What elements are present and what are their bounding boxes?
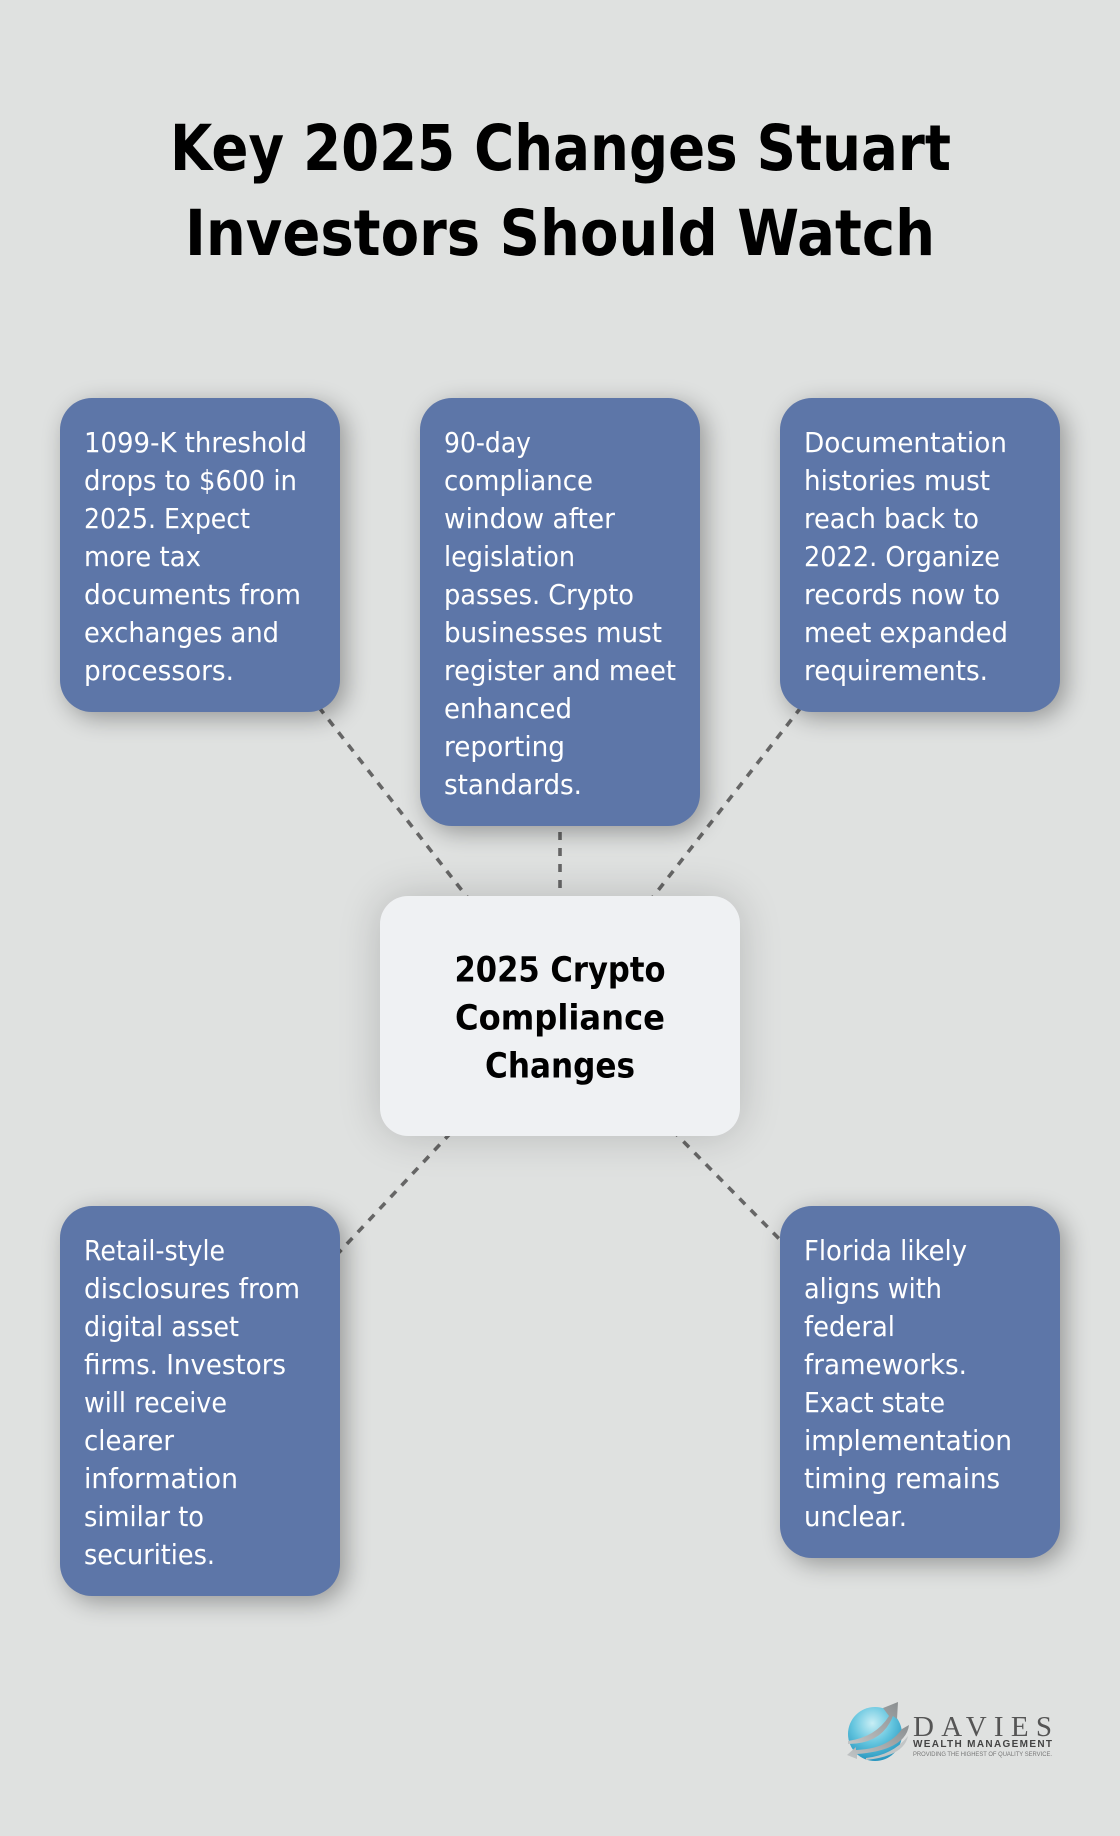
panel: 90-day compliance window: businesses must: [444, 617, 662, 649]
title: Investors Should Watch: [185, 196, 935, 270]
panel: 90-day compliance window: register and meet: [444, 655, 676, 687]
panel: 1099-K threshold: documents from: [84, 579, 301, 611]
logo: Davies Wealth Management: WEALTH MANAGEMENT: [913, 1739, 1052, 1750]
panel: retail-style disclosures: firms. Investors: [84, 1349, 286, 1381]
panel: Florida alignment: federal: [804, 1311, 895, 1343]
panel: retail-style disclosures: similar to: [84, 1501, 204, 1533]
panel: 90-day compliance window: passes. Crypto: [444, 579, 634, 611]
panel: 1099-K threshold: exchanges and: [84, 617, 279, 649]
panel: central hub: Changes: [485, 1046, 635, 1086]
panel: documentation histories: requirements.: [804, 655, 988, 687]
panel: 90-day compliance window: [420, 398, 700, 826]
panel: 1099-K threshold: processors.: [84, 655, 234, 687]
panel: documentation histories: Documentation: [804, 427, 1007, 459]
panel: 90-day compliance window: 90-day: [444, 427, 531, 459]
panel: Florida alignment: [780, 1206, 1060, 1558]
panel: retail-style disclosures: disclosures from: [84, 1273, 300, 1305]
panel: 1099-K threshold: 2025. Expect: [84, 503, 250, 535]
panel: 90-day compliance window: legislation: [444, 541, 575, 573]
panel: Florida alignment: timing remains: [804, 1463, 1000, 1495]
panel: 90-day compliance window: window after: [444, 503, 616, 535]
panel: Florida alignment: Exact state: [804, 1387, 945, 1419]
panel: Florida alignment: aligns with: [804, 1273, 942, 1305]
logo: Davies Wealth Management: DAVIES: [913, 1711, 1052, 1743]
title: Key 2025 Changes Stuart: [170, 111, 951, 185]
panel: 90-day compliance window: compliance: [444, 465, 593, 497]
panel: documentation histories: 2022. Organize: [804, 541, 1000, 573]
panel: documentation histories: [780, 398, 1060, 712]
panel: retail-style disclosures: [60, 1206, 340, 1596]
panel: 90-day compliance window: enhanced: [444, 693, 572, 725]
panel: central hub: Compliance: [455, 998, 665, 1038]
panel: retail-style disclosures: will receive: [84, 1387, 227, 1419]
panel: Florida alignment: frameworks.: [804, 1349, 967, 1381]
logo: Davies Wealth Management: [847, 1702, 1052, 1761]
panel: retail-style disclosures: information: [84, 1463, 238, 1495]
panel: 1099-K threshold: more tax: [84, 541, 201, 573]
panel: Florida alignment: unclear.: [804, 1501, 907, 1533]
panel: retail-style disclosures: clearer: [84, 1425, 175, 1457]
panel: Florida alignment: Florida likely: [804, 1235, 967, 1267]
panel: 1099-K threshold: [60, 398, 340, 712]
panel: 1099-K threshold: drops to $600 in: [84, 465, 297, 497]
panel: retail-style disclosures: securities.: [84, 1539, 215, 1571]
panel: 90-day compliance window: reporting: [444, 731, 565, 763]
logo: Davies Wealth Management: PROVIDING THE HIGHEST OF QUALITY SERVICE.: [913, 1751, 1052, 1758]
panel: central hub: 2025 Crypto: [454, 950, 666, 990]
title: [170, 111, 951, 270]
panel: retail-style disclosures: digital asset: [84, 1311, 239, 1343]
panel: documentation histories: records now to: [804, 579, 1000, 611]
panel: documentation histories: histories must: [804, 465, 990, 497]
panel: documentation histories: reach back to: [804, 503, 979, 535]
panel: central hub: [380, 896, 740, 1136]
panel: retail-style disclosures: Retail-style: [84, 1235, 225, 1267]
panel: documentation histories: meet expanded: [804, 617, 1008, 649]
panel: 1099-K threshold: 1099-K threshold: [84, 427, 307, 459]
panel: Florida alignment: implementation: [804, 1425, 1012, 1457]
panel: 90-day compliance window: standards.: [444, 769, 582, 801]
